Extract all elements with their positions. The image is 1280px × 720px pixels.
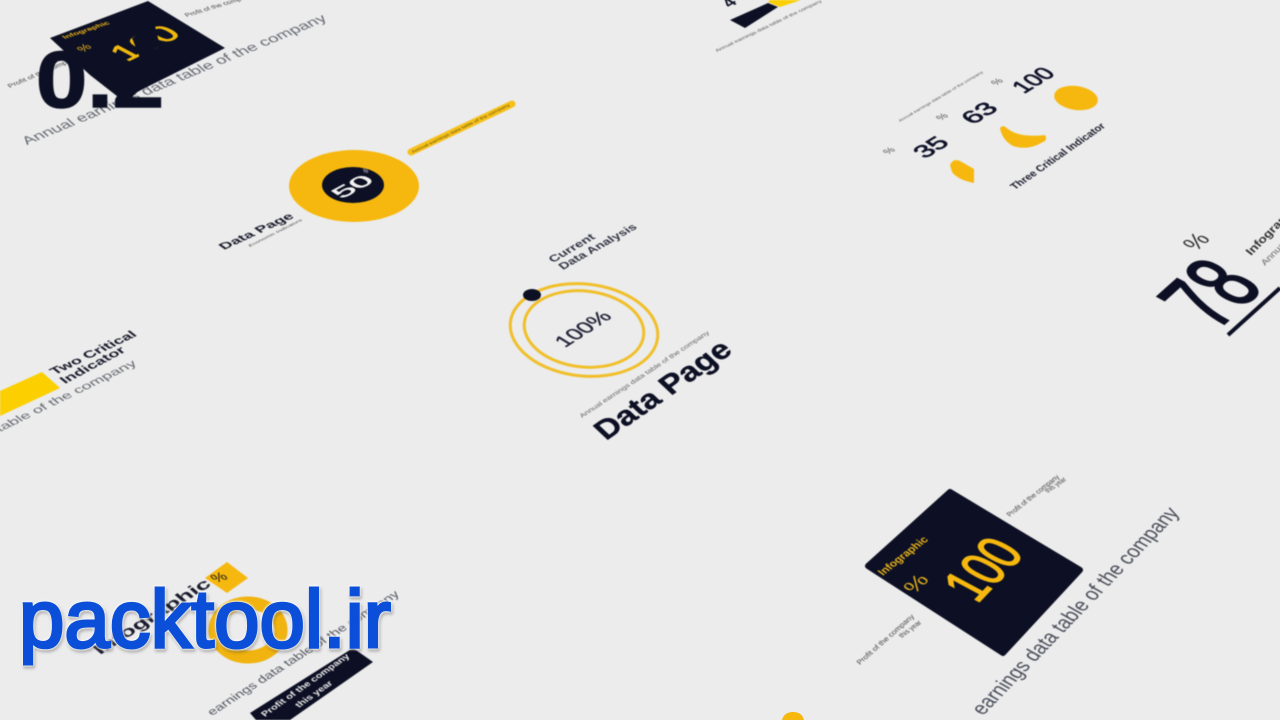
small caption: Annual earnings data table of the company (897, 70, 985, 123)
outer ring (506, 277, 662, 383)
small caption: Annual earnings data table of the company (578, 330, 712, 419)
sub text: Economic Indicators (247, 218, 304, 248)
watermark: packtool.ir (19, 574, 391, 665)
percent signs: % (934, 112, 951, 123)
bar text line one: Profit of the company (259, 652, 353, 718)
percent signs: % (881, 146, 898, 157)
label lower second line: this year (897, 619, 924, 639)
percent signs: % (989, 77, 1006, 88)
yellow disc (289, 150, 419, 222)
yellow shape 35 (950, 160, 974, 183)
percent sign: % (1177, 228, 1216, 255)
yellow bar fragment (768, 0, 801, 7)
heading data page: Data Page (587, 334, 739, 446)
card number 100: 100 (101, 21, 190, 66)
value 50: 50 (325, 172, 380, 201)
underline (1228, 288, 1280, 335)
percent in diamond: % (208, 570, 232, 586)
panel: three critical indicators (881, 64, 1109, 192)
glitch mask over card number (132, 26, 160, 58)
dark inner disc (322, 167, 384, 203)
big number 0.2: 0.2 (36, 35, 164, 124)
panel: bottom-left indicator (88, 562, 402, 720)
value 100%: 100% (550, 308, 617, 351)
label upper second line: this year (1043, 476, 1069, 494)
panel: bottom-right data card (855, 473, 1184, 718)
panel: fifty percent disc (215, 103, 512, 252)
dark bar fragment (730, 3, 778, 28)
label current: Current (546, 232, 598, 265)
icon: bottom yellow fragment (782, 712, 804, 720)
heading data page: Data Page (215, 211, 297, 252)
percent signs (881, 77, 1006, 157)
caption: annual earnings top-left: Annual earnings data table of the company (18, 12, 331, 147)
yellow ring (215, 603, 281, 657)
card number 100: 100 (929, 528, 1037, 610)
panel: top-left data card (5, 0, 331, 147)
yellow shape 100 (1053, 83, 1099, 113)
heading infographic: Infographic (88, 575, 216, 657)
card title infographic: Infographic (60, 20, 112, 40)
card percent sign: % (898, 570, 934, 598)
heading indicator: Indicator (56, 344, 129, 386)
ring marker dot (523, 289, 541, 301)
label: profit left: Profit of the company (5, 54, 82, 89)
inner ring (520, 285, 648, 373)
caption fragment: Annual earnings data table of the company (714, 0, 824, 53)
dark label bar (250, 648, 373, 720)
yellow pill (411, 104, 512, 152)
pill text: Annual earnings data table of the company (410, 103, 512, 154)
yellow shape 63 (1000, 126, 1046, 148)
panel: centre ring (506, 222, 739, 446)
card title infographic: Infographic (875, 534, 932, 578)
panel: seventy-eight percent (1138, 199, 1280, 341)
yellow diamond (205, 562, 248, 593)
bar text line two: this year (293, 679, 335, 709)
value 100: 100 (1006, 64, 1061, 97)
label upper: Profit of the company (1005, 473, 1062, 518)
label data analysis: Data Analysis (556, 222, 640, 272)
caption annual earnings: earnings data table of the company (965, 503, 1184, 718)
dark card top-left (50, 1, 225, 100)
panel: two critical indicator (0, 328, 140, 434)
value 35: 35 (907, 133, 956, 162)
value 63: 63 (955, 98, 1004, 128)
yellow bar (0, 372, 60, 416)
label lower: Profit of the company (855, 613, 916, 666)
panel: top centre fragment (714, 0, 824, 53)
card percent sign: % (74, 41, 95, 55)
tiny percent: % (363, 169, 369, 175)
caption: earnings data table of the company (204, 588, 402, 718)
dark card (868, 492, 1080, 653)
heading two critical: Two Critical (46, 328, 140, 377)
value 78: 78 (1138, 245, 1280, 341)
heading three critical indicator: Three Critical Indicator (1008, 121, 1109, 192)
